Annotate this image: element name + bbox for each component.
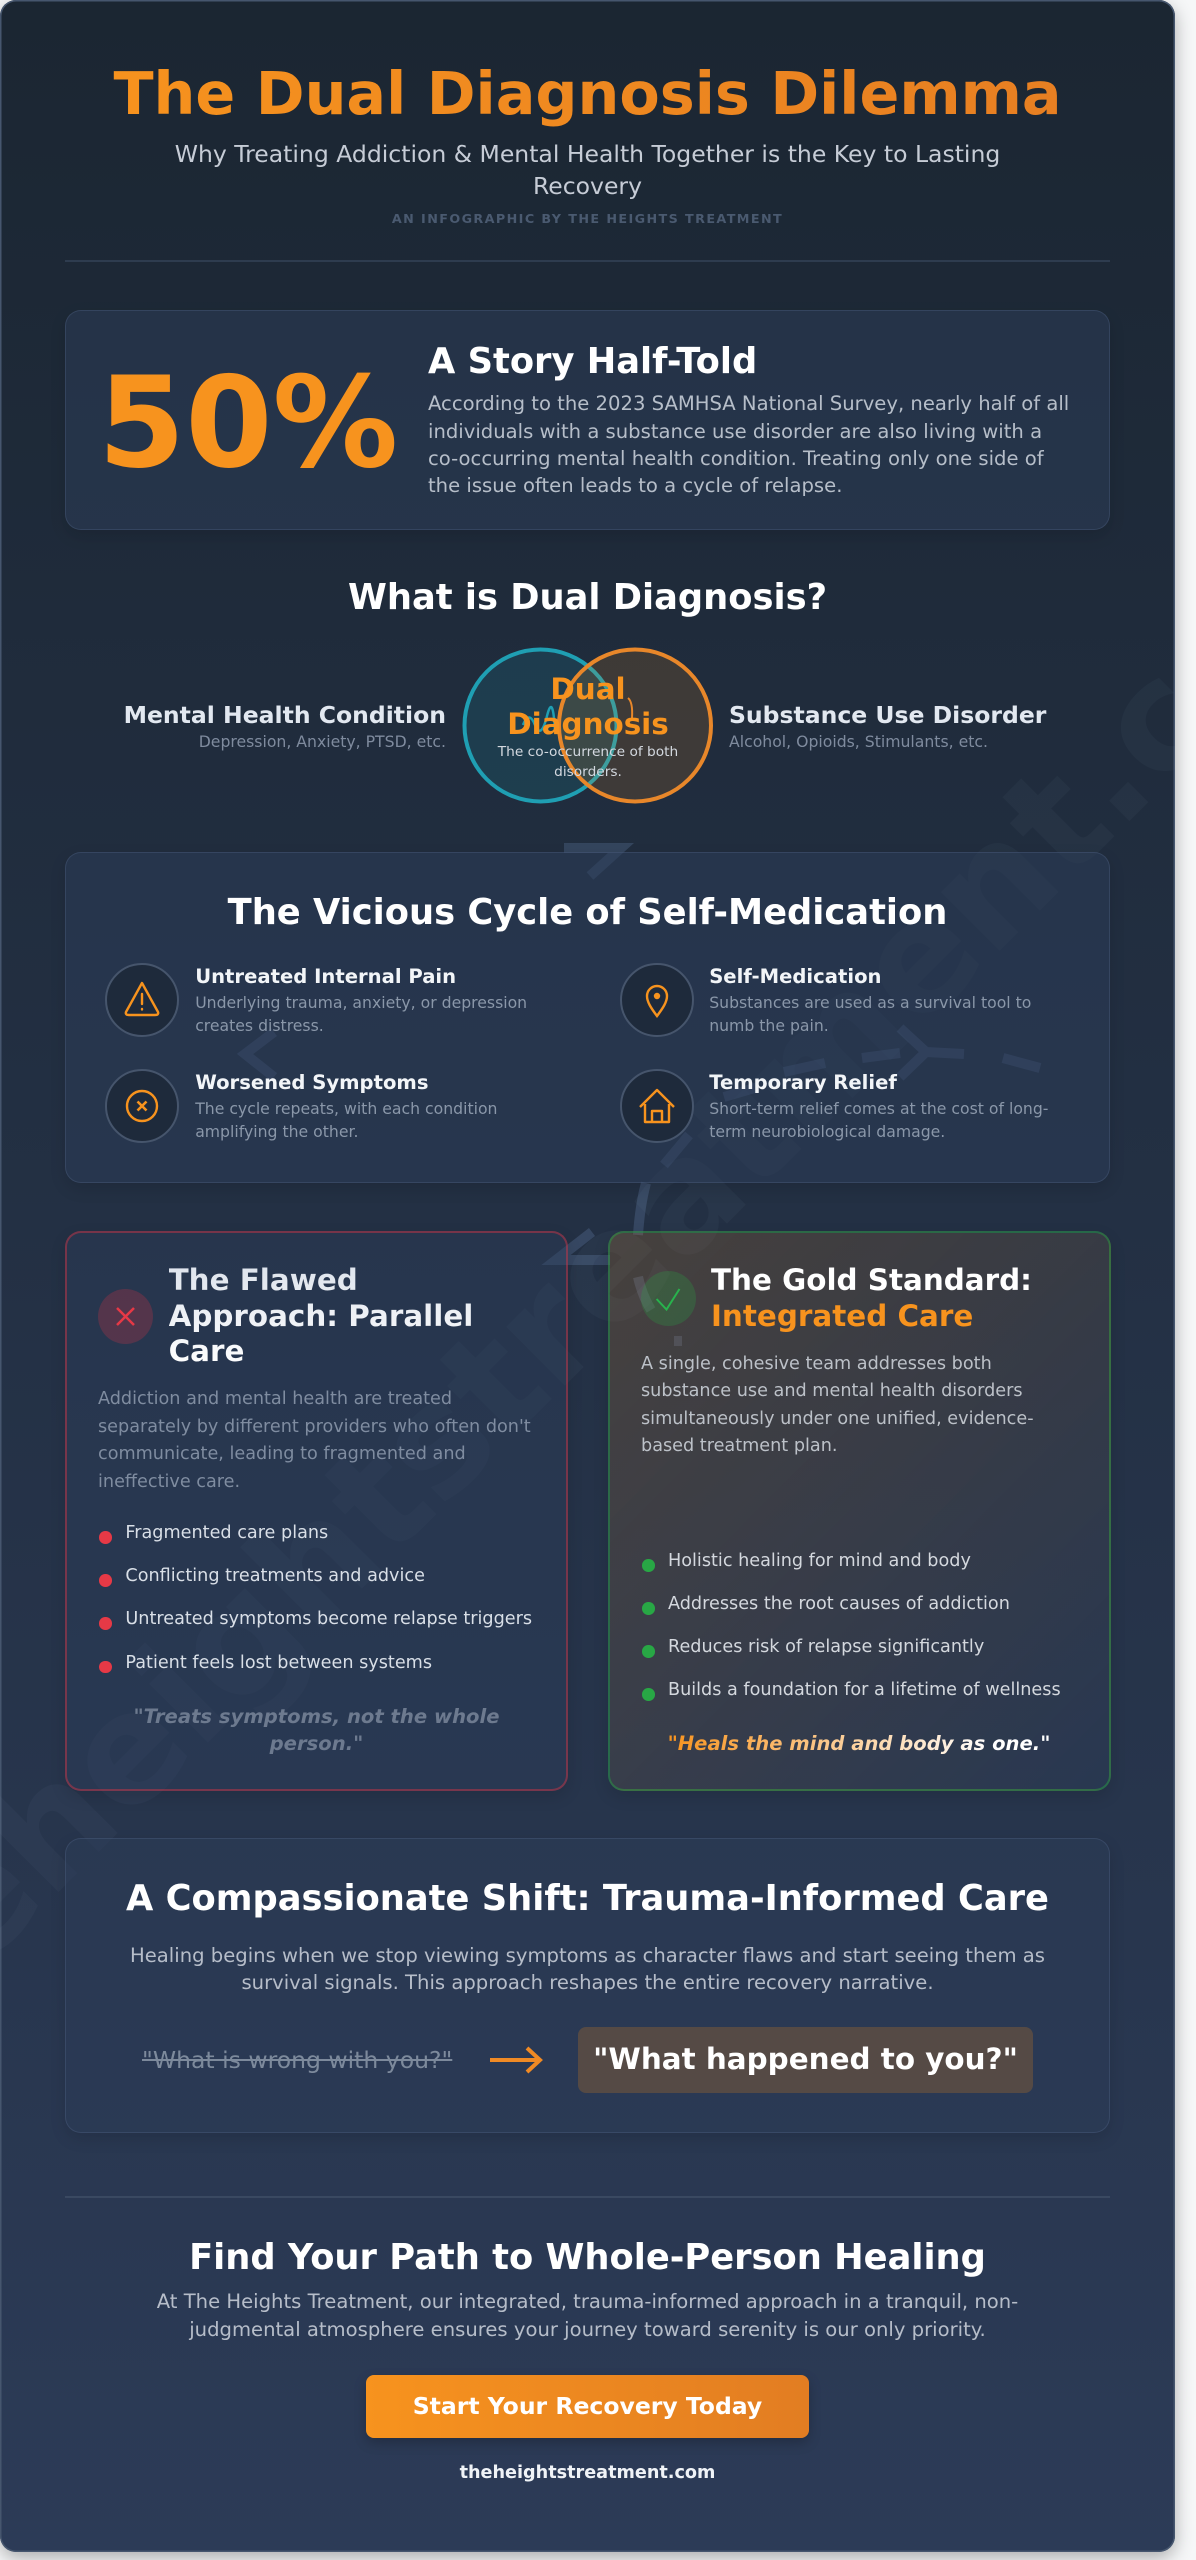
heading: A Compassionate Shift: Trauma-Informed Care — [126, 1878, 1049, 1919]
button: Start Your Recovery Today — [413, 2392, 762, 2420]
panel: trauma-informed care — [65, 1838, 1110, 2133]
quote — [133, 1704, 500, 1755]
heading: The Gold Standard: — [711, 1263, 1032, 1297]
bullet list — [642, 1551, 1061, 1701]
body text — [641, 1354, 1034, 1456]
subtitle: Why Treating Addiction & Mental Health Together is the Key to Lasting — [175, 140, 1000, 168]
website: theheightstreatment.com — [460, 2463, 715, 2483]
venn diagram — [462, 648, 713, 804]
step: temporary relief: term neurobiological damage. — [709, 1122, 945, 1141]
step: untreated pain: Untreated Internal Pain — [195, 965, 456, 988]
step: untreated pain: creates distress. — [195, 1016, 324, 1035]
icon: map pin — [620, 963, 694, 1037]
arrow — [490, 2046, 543, 2074]
label: mental health — [124, 701, 446, 751]
heading — [711, 1263, 1032, 1333]
body text: survival signals. This approach reshapes the entire recovery narrative. — [241, 1971, 934, 1994]
body text: judgmental atmosphere ensures your journey toward serenity is our only priority. — [189, 2318, 986, 2341]
body text: According to the 2023 SAMHSA National Survey, nearly half of all — [428, 392, 1069, 415]
new question box: "What happened to you?" — [593, 2042, 1018, 2076]
body text — [98, 1389, 531, 1492]
panel: integrated care — [608, 1231, 1110, 1791]
body text: At The Heights Treatment, our integrated, trauma-informed approach in a tranquil, non- — [157, 2290, 1018, 2313]
step: temporary relief — [709, 1071, 1048, 1141]
label: substance use: Alcohol, Opioids, Stimulants, etc. — [729, 732, 988, 751]
button — [366, 2375, 809, 2438]
bullet list: Holistic healing for mind and body — [668, 1551, 971, 1571]
panel: vicious cycle — [65, 852, 1110, 1183]
step: untreated pain: Underlying trauma, anxiety, or depression — [195, 993, 527, 1012]
subtitle: Recovery — [533, 172, 642, 200]
heading: what is dual diagnosis: What is Dual Diagnosis? — [348, 577, 827, 618]
body text: the issue often leads to a cycle of relapse. — [428, 474, 842, 497]
icon: green check — [641, 1271, 696, 1326]
step: untreated pain — [195, 965, 527, 1035]
new question box — [578, 2027, 1033, 2093]
body text: A single, cohesive team addresses both — [641, 1354, 992, 1374]
body text: substance use and mental health disorders — [641, 1381, 1023, 1401]
body text: separately by different providers who often don't — [98, 1417, 531, 1437]
quote: person." — [270, 1732, 363, 1755]
big stat 50%: 50% — [98, 350, 398, 496]
body text — [428, 392, 1069, 497]
bullet list: Builds a foundation for a lifetime of wellness — [668, 1680, 1061, 1700]
icon: x circle — [105, 1069, 179, 1143]
bullet list: Untreated symptoms become relapse triggers — [125, 1609, 532, 1629]
body text: co-occurring mental health condition. Treating only one side of — [428, 447, 1044, 470]
body text: communicate, leading to fragmented and — [98, 1444, 466, 1464]
bullet — [642, 1559, 654, 1572]
bullet list: Fragmented care plans — [125, 1523, 328, 1543]
body text: simultaneously under one unified, evidence- — [641, 1409, 1034, 1429]
body text: ineffective care. — [98, 1472, 240, 1492]
label: mental health: Depression, Anxiety, PTSD, etc. — [199, 732, 446, 751]
old question, struck through: "What is wrong with you?" — [142, 2046, 452, 2074]
body text: Addiction and mental health are treated — [98, 1389, 452, 1409]
heading: Find Your Path to Whole-Person Healing — [189, 2237, 986, 2278]
venn center label: Dual — [550, 672, 626, 706]
bullet list: Addresses the root causes of addiction — [668, 1594, 1010, 1614]
venn caption — [498, 744, 678, 780]
body text: Healing begins when we stop viewing symptoms as character flaws and start seeing them as — [130, 1944, 1045, 1967]
step: worsened symptoms: amplifying the other. — [195, 1122, 358, 1141]
venn center label — [507, 672, 669, 741]
bullet — [99, 1531, 112, 1544]
heading: The Vicious Cycle of Self-Medication — [228, 892, 947, 933]
subtitle — [175, 140, 1000, 200]
venn center label: Diagnosis — [507, 707, 669, 741]
step: temporary relief: Short-term relief comes at the cost of long- — [709, 1099, 1048, 1118]
bullet list: Conflicting treatments and advice — [125, 1566, 425, 1586]
icon: red x — [98, 1289, 153, 1344]
step: worsened symptoms: The cycle repeats, with each condition — [195, 1099, 497, 1118]
heading: Approach: Parallel — [169, 1299, 473, 1333]
body text: based treatment plan. — [641, 1436, 837, 1456]
title: The Dual Diagnosis Dilemma — [113, 59, 1062, 128]
bullet list — [99, 1523, 532, 1673]
heading: The Flawed — [169, 1263, 358, 1297]
panel: statistic — [65, 310, 1110, 530]
venn caption: disorders. — [554, 764, 622, 780]
byline: AN INFOGRAPHIC BY THE HEIGHTS TREATMENT — [392, 212, 783, 227]
label: substance use: Substance Use Disorder — [729, 701, 1046, 729]
panel: flawed approach — [65, 1231, 568, 1791]
step: worsened symptoms: Worsened Symptoms — [195, 1071, 428, 1094]
bullet list: Patient feels lost between systems — [125, 1653, 432, 1673]
body text: individuals with a substance use disorder are also living with a — [428, 420, 1042, 443]
label: mental health: Mental Health Condition — [124, 701, 446, 729]
heading: Integrated Care — [711, 1299, 973, 1333]
step: self-medication: Substances are used as a survival tool to — [709, 993, 1031, 1012]
bullet list: Reduces risk of relapse significantly — [668, 1637, 984, 1657]
venn caption: The co-occurrence of both — [498, 744, 678, 760]
body text — [130, 1944, 1045, 1994]
quote: "Heals the mind and body as one." — [668, 1732, 1050, 1754]
step: self-medication: Self-Medication — [709, 965, 881, 988]
quote: "Treats symptoms, not the whole — [133, 1704, 500, 1728]
step: temporary relief: Temporary Relief — [709, 1071, 897, 1094]
heading: Care — [169, 1334, 244, 1368]
step: self-medication: numb the pain. — [709, 1016, 829, 1035]
header — [113, 59, 1062, 227]
step: self-medication — [709, 965, 1031, 1035]
icon: warning triangle — [105, 963, 179, 1037]
footer call to action — [157, 2237, 1018, 2483]
icon: house — [620, 1069, 694, 1143]
step: worsened symptoms — [195, 1071, 497, 1141]
heading: A Story Half-Told — [428, 341, 757, 382]
label: substance use — [729, 701, 1046, 751]
heading — [169, 1263, 473, 1369]
body text — [157, 2290, 1018, 2341]
